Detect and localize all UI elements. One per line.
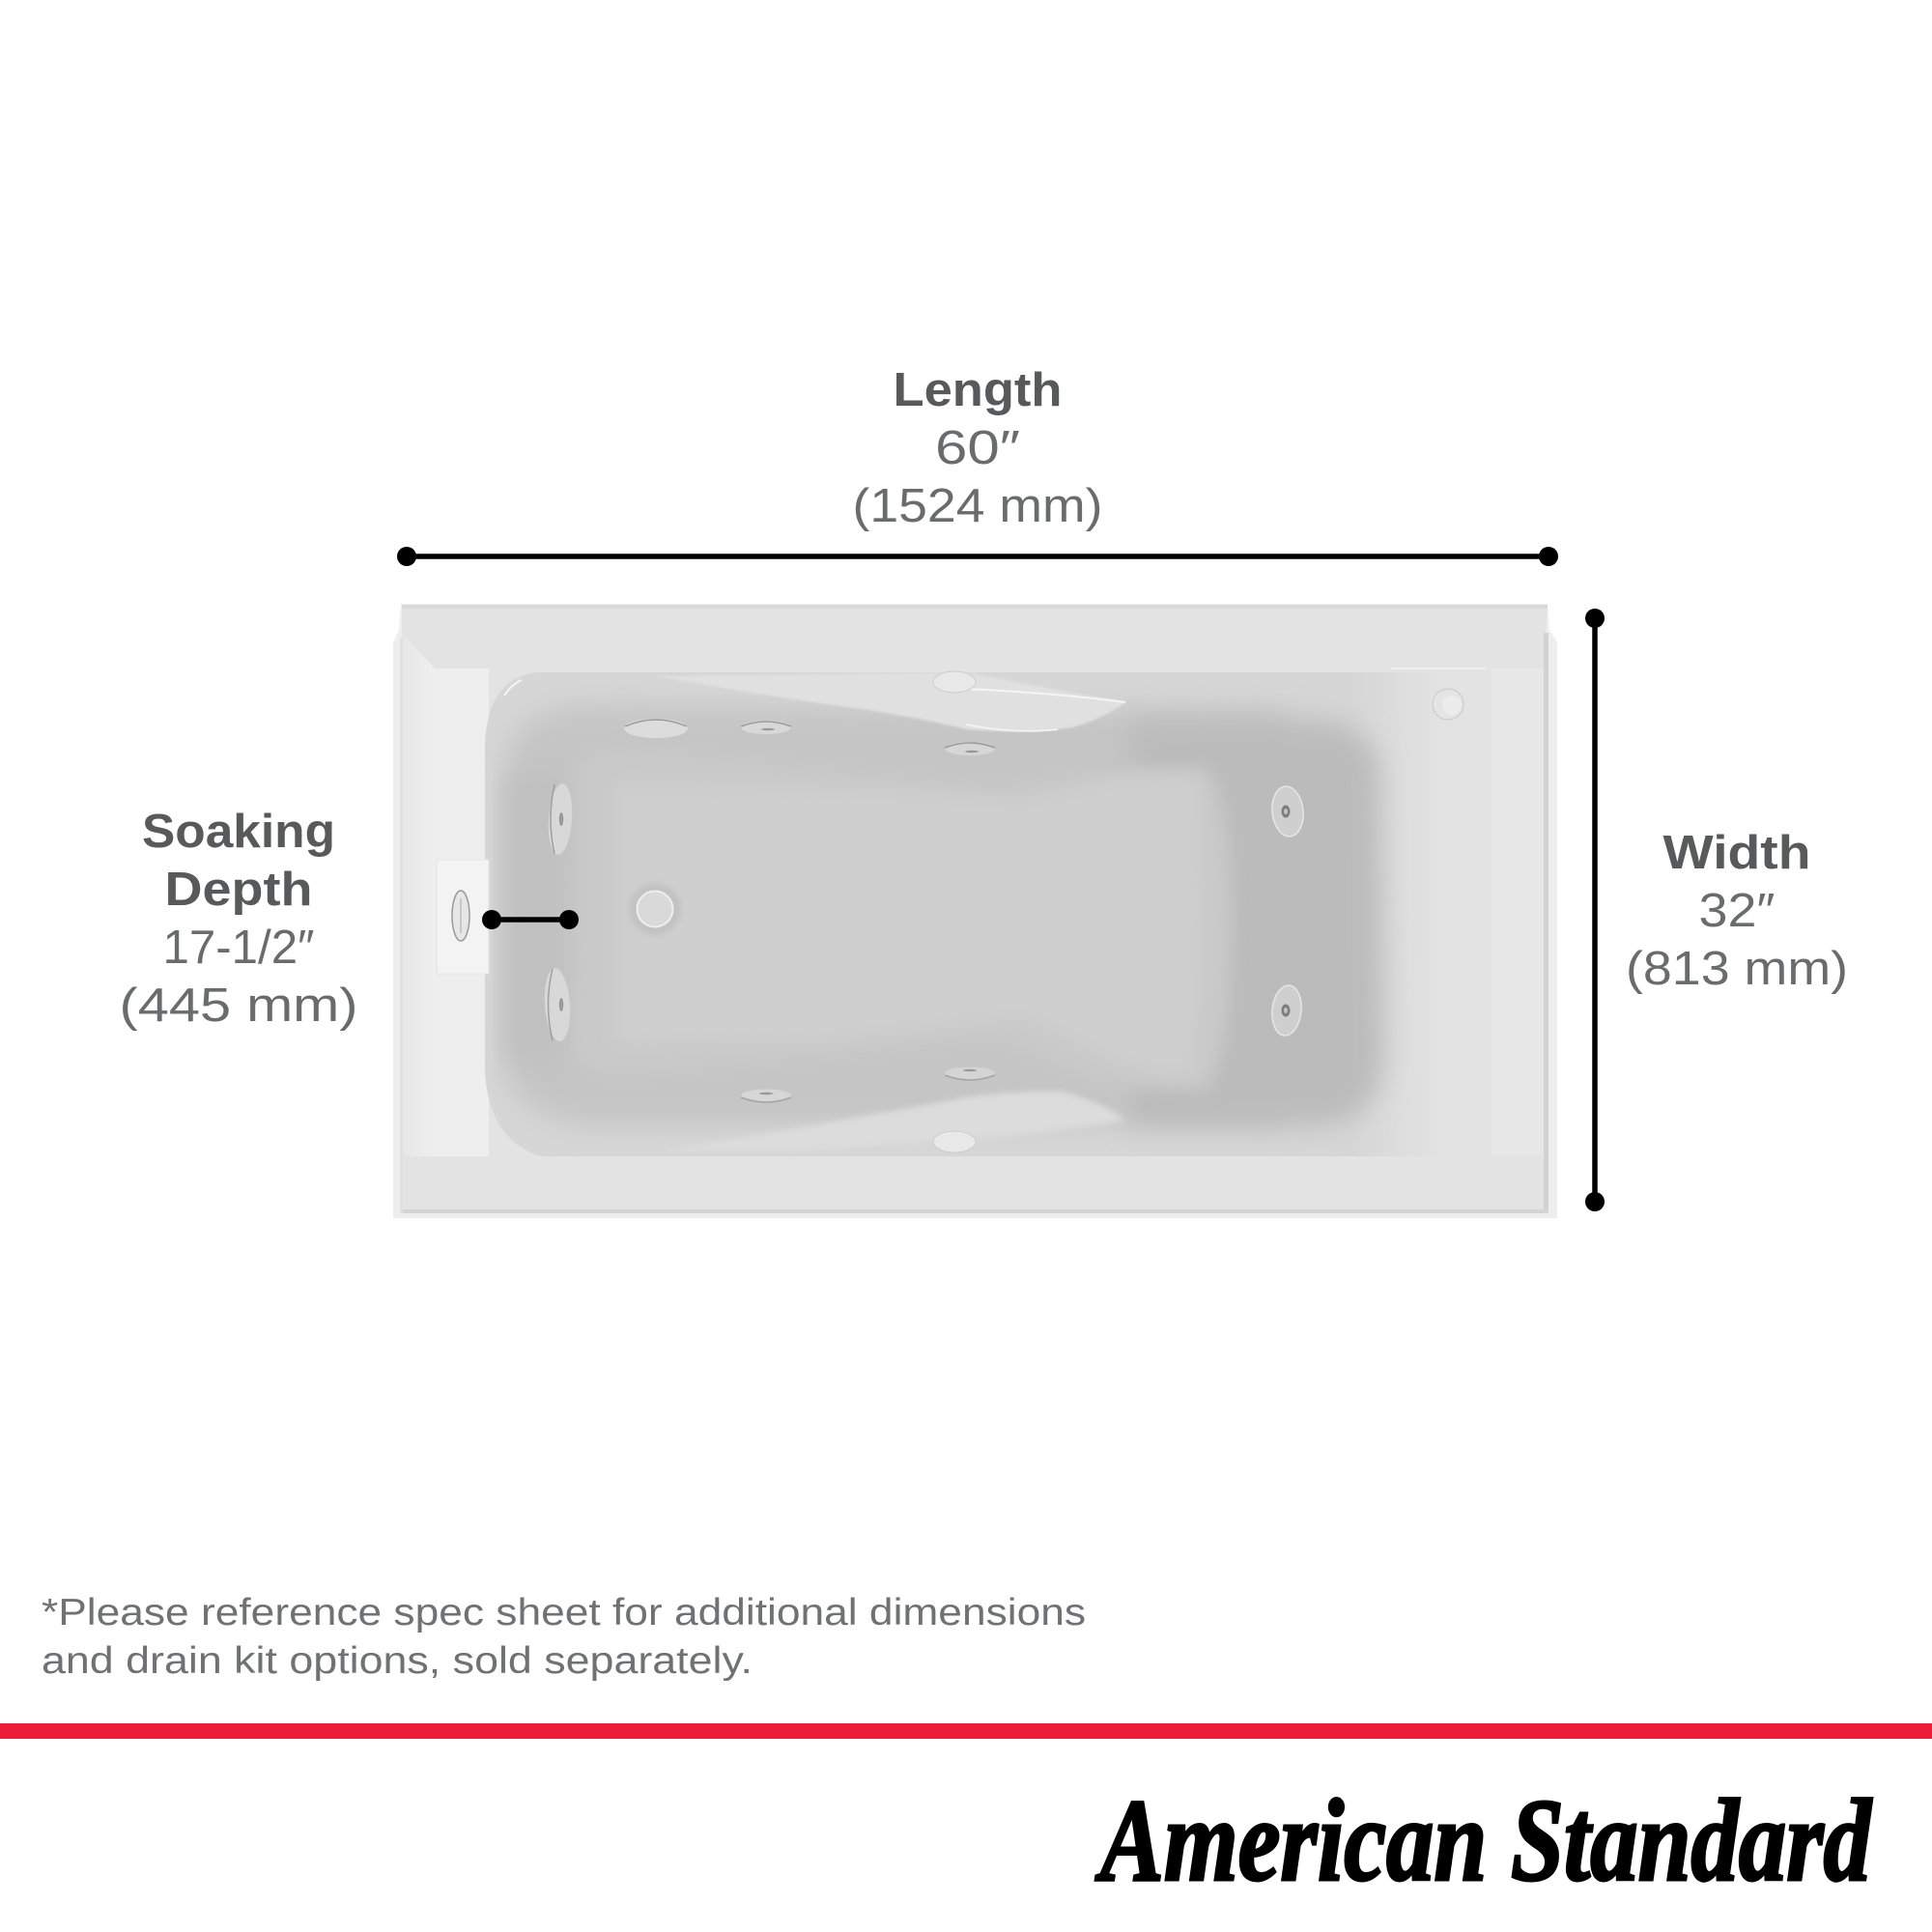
drain bbox=[629, 883, 681, 935]
head end fade bbox=[1357, 672, 1385, 1156]
tub floor bbox=[616, 777, 1202, 1078]
footnote: *Please reference spec sheet for additional dimensions bbox=[42, 1592, 1086, 1634]
control nub bottom bbox=[933, 1131, 976, 1152]
jet: bottom 1 bbox=[741, 1090, 791, 1102]
jet: foot lower bbox=[542, 967, 573, 1042]
length dimension line bbox=[397, 547, 1558, 566]
bottom ledge bbox=[657, 1092, 1125, 1151]
jet: bottom 2 bbox=[945, 1066, 995, 1080]
width dimension line bbox=[1585, 609, 1605, 1211]
dimension label: width bbox=[1626, 827, 1848, 995]
dimension label: soaking depth bbox=[120, 806, 357, 1032]
control panel bbox=[437, 860, 489, 974]
dimension label: width: Width bbox=[1663, 827, 1810, 879]
top and front edge lines bbox=[400, 605, 1548, 1213]
footnote: and drain kit options, sold separately. bbox=[42, 1640, 753, 1682]
red divider bar bbox=[0, 1723, 1932, 1739]
left deck bbox=[402, 633, 435, 1159]
basin bbox=[478, 668, 1493, 1156]
dimension label: width: 32″ bbox=[1698, 885, 1776, 937]
basin wall shading bbox=[508, 705, 1145, 1126]
inner rim bbox=[435, 668, 1492, 1156]
jet: head upper bbox=[1269, 784, 1306, 838]
dimension label: length: 60″ bbox=[935, 422, 1020, 474]
basin base bbox=[478, 668, 1357, 1156]
top ledge bbox=[657, 672, 1125, 731]
bathtub top view bbox=[393, 604, 1557, 1218]
dimension label: length bbox=[852, 364, 1103, 532]
soaking depth dimension line bbox=[482, 910, 579, 929]
control nub top bbox=[933, 671, 976, 693]
bottom deck bbox=[402, 1156, 1546, 1210]
corner highlight bbox=[504, 680, 522, 696]
foot end shadow bbox=[510, 796, 514, 1039]
dimension label: length: Length bbox=[893, 364, 1063, 416]
dimension label: soaking depth: Depth bbox=[164, 864, 313, 916]
jet: foot upper bbox=[546, 782, 575, 856]
head end shadow bbox=[1130, 720, 1383, 1125]
dimension label: soaking depth: Soaking bbox=[142, 806, 335, 858]
dimension label: soaking depth: 17-1/2″ bbox=[162, 922, 315, 974]
dimension label: length: (1524 mm) bbox=[852, 480, 1103, 532]
dimension label: soaking depth: (445 mm) bbox=[120, 980, 357, 1032]
jet: side 3 bbox=[945, 742, 995, 755]
top deck bbox=[402, 607, 1548, 668]
right deck bbox=[1492, 667, 1546, 1159]
jet: head lower bbox=[1269, 984, 1304, 1037]
jet: side 2 bbox=[741, 721, 791, 734]
tub outer apron bbox=[393, 604, 1557, 1218]
jet: side 1 bbox=[624, 719, 688, 738]
jets bbox=[542, 671, 1306, 1152]
dimension label: width: (813 mm) bbox=[1626, 943, 1848, 995]
floor step bbox=[1128, 771, 1230, 1089]
overflow cap bbox=[1433, 689, 1463, 720]
footnote bbox=[42, 1592, 1086, 1682]
